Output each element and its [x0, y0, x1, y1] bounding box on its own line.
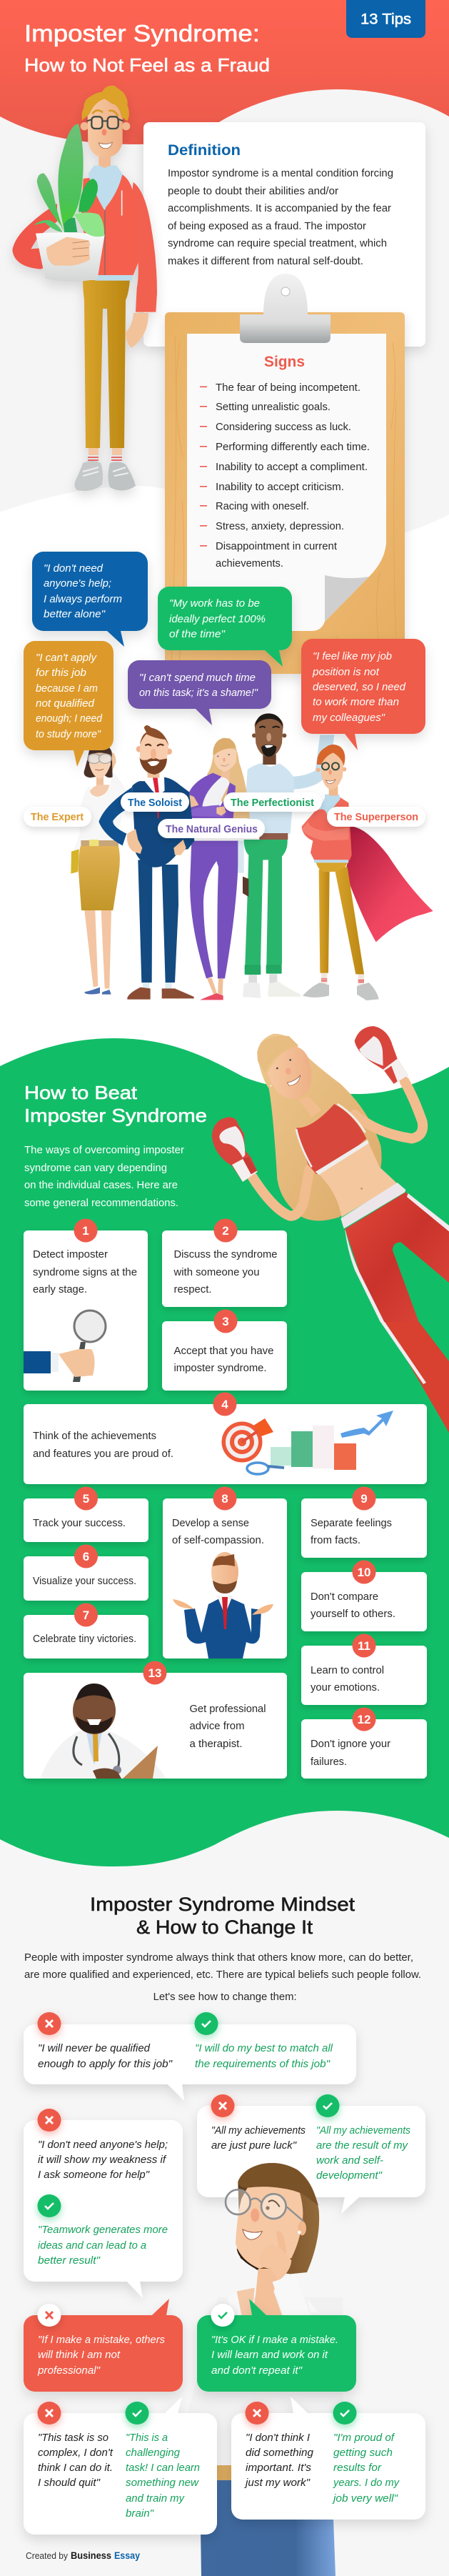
definition text: people to doubt their abilities and/or	[168, 186, 338, 197]
card 10: 10	[358, 1566, 370, 1579]
mindset intro text: are more qualified and experienced, etc. There are typical beliefs such people follow.	[24, 1969, 421, 1981]
card 1: Detect imposter	[33, 1249, 108, 1260]
bubble: help: ideas and can lead to a	[38, 2240, 146, 2252]
x icon	[211, 2094, 234, 2117]
check icon	[316, 2094, 340, 2117]
glove left	[212, 1117, 258, 1182]
bubble: my work: just my work"	[244, 2477, 311, 2489]
panel: clipboard with signs	[165, 274, 405, 674]
card 4: and features you are proud of.	[33, 1448, 173, 1460]
card 8	[163, 1486, 287, 1659]
label: the expert	[24, 807, 91, 827]
x icon	[37, 2109, 61, 2132]
icon: magnifier in hand	[24, 1311, 106, 1382]
bubble: help: "I don't need anyone's help;	[38, 2139, 168, 2151]
card 1	[24, 1219, 148, 1391]
card 13	[24, 1661, 287, 1779]
card 3: Accept that you have	[174, 1346, 274, 1357]
bubble: luck: work and self-	[316, 2155, 383, 2167]
bubble: help: it will show my weakness if	[38, 2154, 167, 2166]
card 8: Develop a sense	[172, 1518, 249, 1529]
character: thinking woman	[183, 2163, 343, 2576]
bubble: qualified	[24, 2012, 356, 2101]
bubble: my work: "I'm proud of	[333, 2432, 395, 2444]
speech bubble: the superperson: to work more than	[313, 697, 399, 708]
bubble: qualified: "I will do my best to match all	[195, 2043, 333, 2054]
bubble: my work: job very well"	[332, 2493, 398, 2505]
the superperson	[302, 745, 433, 1000]
definition text: syndrome can require special treatment, which	[168, 238, 387, 249]
speech bubble: the soloist: anyone's help;	[44, 578, 111, 590]
card 11: your emotions.	[311, 1682, 380, 1694]
character: boxing woman	[212, 1026, 449, 1433]
card 13: Get professional	[190, 1704, 266, 1715]
title: How to Not Feel as a Fraud	[24, 54, 270, 76]
bubble: complex task: "This is a	[126, 2432, 168, 2444]
label: the natural genius: The Natural Genius	[166, 823, 258, 835]
card 13: 13	[148, 1666, 161, 1680]
bubble: my work: "I don't think I	[246, 2432, 310, 2444]
bubble: mistake (positive)	[197, 2299, 356, 2392]
signs list: Inability to accept criticism.	[216, 482, 344, 493]
icon: shrugging man	[173, 1552, 273, 1659]
label: the superperson	[327, 807, 425, 827]
speech bubble: the superperson: position is not	[312, 667, 380, 678]
card 11: 11	[358, 1639, 370, 1653]
paper	[187, 334, 386, 631]
label: the superperson: The Superperson	[334, 811, 418, 823]
speech bubble: the superperson: deserved, so I need	[313, 682, 406, 693]
title: Imposter Syndrome:	[24, 20, 260, 46]
card 9	[301, 1486, 427, 1558]
speech bubble: the perfectionist: "My work has to be	[169, 598, 260, 610]
card 12	[301, 1708, 427, 1779]
bubble: complex task: think I can do it.	[38, 2462, 113, 2474]
card 6: Visualize your success.	[33, 1576, 136, 1587]
speech bubble: the superperson	[301, 639, 425, 750]
speech bubble: the perfectionist: of the time"	[169, 629, 226, 640]
bubble: help: better result"	[38, 2255, 101, 2267]
the perfectionist	[243, 713, 334, 998]
intro text	[24, 1145, 184, 1209]
bubble: mistake (positive): and don't repeat it"	[211, 2365, 303, 2377]
bubble: my work: did something	[246, 2447, 313, 2459]
bubble: luck: development"	[316, 2170, 383, 2182]
card 5	[24, 1486, 148, 1542]
bubble: complex task: and train my	[126, 2493, 185, 2505]
heading: how to beat	[24, 1082, 207, 1126]
speech bubble: the natural genius	[128, 660, 271, 725]
heading: how to beat: How to Beat	[24, 1082, 138, 1103]
footer credit: Business	[71, 2550, 111, 2561]
label: the perfectionist	[223, 792, 322, 812]
footer credit	[26, 2550, 140, 2561]
bubble: complex task: task! I can learn	[126, 2462, 200, 2474]
speech bubble: the superperson: "I feel like my job	[313, 651, 392, 662]
the soloist	[99, 725, 194, 1000]
signs list: Performing differently each time.	[216, 442, 370, 453]
card 13: a therapist.	[190, 1739, 243, 1750]
card 13: advice from	[190, 1721, 244, 1732]
heading: how to beat: Imposter Syndrome	[24, 1105, 207, 1126]
card 2	[162, 1219, 287, 1307]
card 11	[301, 1633, 427, 1705]
definition text: Impostor syndrome is a mental condition forcing	[168, 168, 393, 179]
bubble: my work: results for	[333, 2462, 382, 2474]
speech bubble: the soloist	[32, 552, 148, 647]
glove right	[355, 1026, 408, 1084]
bubble: my work: important. It's	[246, 2462, 311, 2474]
speech bubble: the expert: because I am	[36, 683, 98, 695]
check icon	[211, 2304, 234, 2327]
signs list	[200, 382, 370, 570]
speech bubble: the natural genius: "I can't spend much time	[139, 672, 256, 684]
x icon	[37, 2304, 61, 2327]
green section background	[0, 1038, 449, 1866]
bubble: mistake (positive): I will learn and work on it	[211, 2349, 328, 2361]
speech bubble: the expert: not qualified	[36, 698, 95, 710]
card 9: 9	[360, 1492, 368, 1506]
speech bubble: the expert: enough; I need	[36, 713, 103, 725]
speech bubble: the soloist: better alone"	[44, 609, 106, 620]
speech bubble: the natural genius: on this task; it's a shame!"	[139, 687, 258, 699]
bubble: qualified: the requirements of this job"	[195, 2059, 331, 2070]
check icon	[126, 2402, 148, 2425]
x icon	[246, 2402, 268, 2425]
footer credit: Essay	[114, 2550, 140, 2561]
card 2: with someone you	[173, 1267, 260, 1278]
check icon	[333, 2402, 357, 2425]
red header wave	[0, 0, 449, 144]
intro text: The ways of overcoming imposter	[24, 1145, 184, 1156]
card 6	[24, 1545, 148, 1601]
clip	[240, 274, 331, 343]
icon: doctor	[40, 1684, 166, 1779]
signs list: Stress, anxiety, depression.	[216, 521, 344, 532]
card 3: 3	[222, 1315, 229, 1328]
speech bubble: the expert: "I can't apply	[36, 652, 97, 664]
bubble: qualified: enough to apply for this job"	[38, 2059, 173, 2070]
card 4	[24, 1392, 427, 1484]
character: man with plant	[12, 86, 157, 491]
bubble: mistake (negative)	[24, 2299, 183, 2392]
speech bubble: the perfectionist	[158, 587, 292, 667]
card 12: failures.	[311, 1756, 347, 1768]
title	[24, 20, 270, 76]
bubble: luck: "All my achievements	[316, 2125, 410, 2137]
bubble: help	[24, 2109, 183, 2298]
x icon	[37, 2012, 61, 2035]
paper curl	[325, 575, 369, 622]
signs list: Inability to accept a compliment.	[216, 462, 368, 473]
card 1: syndrome signs at the	[33, 1267, 137, 1278]
mindset intro text: People with imposter syndrome always think that others know more, can do better,	[24, 1952, 413, 1964]
card 2: respect.	[174, 1284, 211, 1296]
speech bubble: the expert: for this job	[36, 667, 86, 679]
intro text: syndrome can vary depending	[24, 1163, 167, 1174]
heading: mindset: Imposter Syndrome Mindset	[90, 1894, 355, 1915]
definition text: makes it different from natural self-doubt.	[168, 256, 363, 267]
bubble: mistake (negative): professional"	[37, 2365, 101, 2377]
card 12: Don't ignore your	[311, 1739, 390, 1750]
card 7: 7	[83, 1608, 89, 1622]
bubble: complex task: complex, I don't	[38, 2447, 113, 2459]
bubble: my work: years. I do my	[333, 2477, 400, 2489]
footer credit: Created by	[26, 2550, 68, 2561]
card 10	[301, 1561, 427, 1631]
label: the expert: The Expert	[31, 811, 84, 823]
signs list: Considering success as luck.	[216, 422, 351, 433]
label: the perfectionist: The Perfectionist	[231, 797, 314, 809]
signs list: Racing with oneself.	[216, 501, 309, 512]
card 9: from facts.	[311, 1535, 360, 1546]
card 2: Discuss the syndrome	[174, 1249, 277, 1260]
bubble: complex task: "This task is so	[38, 2432, 109, 2444]
definition text: of being exposed as a fraud. The impostor	[168, 221, 366, 232]
bubble: qualified: "I will never be qualified	[38, 2043, 151, 2054]
heading: mindset	[90, 1894, 355, 1938]
card 11: Learn to control	[311, 1665, 384, 1676]
bubble: luck: are the result of my	[316, 2140, 408, 2152]
card 3	[162, 1309, 287, 1391]
card 7	[24, 1603, 148, 1659]
bubble: my work: getting such	[333, 2447, 393, 2459]
check icon	[37, 2194, 61, 2217]
definition text	[168, 168, 393, 267]
card 2: 2	[222, 1224, 229, 1238]
speech bubble: the soloist: I always perform	[44, 594, 122, 605]
card 5: 5	[83, 1492, 89, 1506]
card 10: Don't compare	[311, 1591, 378, 1603]
bubble: help: "Teamwork generates more	[38, 2224, 168, 2236]
heading: mindset: & How to Change It	[136, 1916, 313, 1938]
the natural genius	[183, 738, 250, 1000]
signs list: achievements.	[216, 558, 283, 570]
badge: 13 tips: 13 Tips	[360, 11, 411, 27]
mindset intro text: Let's see how to change them:	[153, 1991, 297, 2003]
check icon	[194, 2012, 218, 2035]
card 1: early stage.	[33, 1284, 87, 1296]
label: the soloist: The Soloist	[128, 797, 182, 809]
icon: target and bar chart	[221, 1411, 393, 1474]
card 3: imposter syndrome.	[174, 1363, 267, 1374]
bubble: complex task: something new	[126, 2477, 200, 2489]
characters: five imposter types	[71, 713, 433, 1000]
bubble: luck: "All my achievements	[211, 2125, 306, 2137]
card 7: Celebrate tiny victories.	[33, 1633, 136, 1645]
bubble: mistake (positive): "It's OK if I make a mistake.	[211, 2334, 338, 2346]
bubble: complex task: brain"	[126, 2508, 154, 2520]
bubble: complex task	[24, 2397, 217, 2535]
card 1: 1	[82, 1224, 89, 1238]
card 6: 6	[83, 1550, 89, 1563]
card 4: Think of the achievements	[33, 1431, 156, 1442]
label: the soloist	[121, 792, 189, 812]
bubble: mistake (negative): "If I make a mistake, others	[38, 2334, 165, 2346]
bubble: luck: are just pure luck"	[211, 2140, 297, 2152]
card 8: of self-compassion.	[172, 1535, 264, 1546]
the expert	[71, 744, 126, 995]
card 8: 8	[221, 1492, 228, 1506]
card 12: 12	[358, 1713, 370, 1726]
label: the natural genius	[158, 819, 265, 838]
signs list: The fear of being incompetent.	[216, 382, 360, 394]
signs list: Setting unrealistic goals.	[216, 402, 331, 413]
bubble: mistake (negative): will think I am not	[38, 2349, 121, 2361]
speech bubble: the soloist: "I don't need	[44, 563, 104, 575]
signs heading: Signs	[264, 354, 305, 370]
definition text: accomplishments. It is accompanied by the fear	[168, 203, 391, 214]
card 10: yourself to others.	[311, 1608, 395, 1620]
intro text: some general recommendations.	[24, 1198, 178, 1209]
x icon	[37, 2402, 61, 2425]
bubble: luck	[197, 2094, 425, 2214]
panel: definition	[143, 122, 425, 347]
speech bubble: the perfectionist: ideally perfect 100%	[169, 614, 266, 625]
bubble: help: I ask someone for help"	[38, 2169, 150, 2181]
speech bubble: the expert	[24, 641, 113, 767]
card 4: 4	[221, 1398, 228, 1411]
mindset intro text	[24, 1952, 421, 2003]
card 9: Separate feelings	[311, 1518, 392, 1529]
speech bubble: the expert: to study more"	[36, 729, 101, 740]
bubble: my work	[231, 2397, 425, 2520]
bubble: complex task: challenging	[126, 2447, 180, 2459]
signs list: Disappointment in current	[216, 541, 337, 552]
intro text: on the individual cases. Here are	[24, 1180, 178, 1191]
card 5: Track your success.	[33, 1518, 126, 1529]
speech bubble: the superperson: my colleagues"	[313, 712, 385, 724]
bubble: complex task: I should quit"	[38, 2477, 101, 2489]
badge: 13 tips	[346, 0, 425, 38]
definition heading: Definition	[168, 141, 241, 159]
